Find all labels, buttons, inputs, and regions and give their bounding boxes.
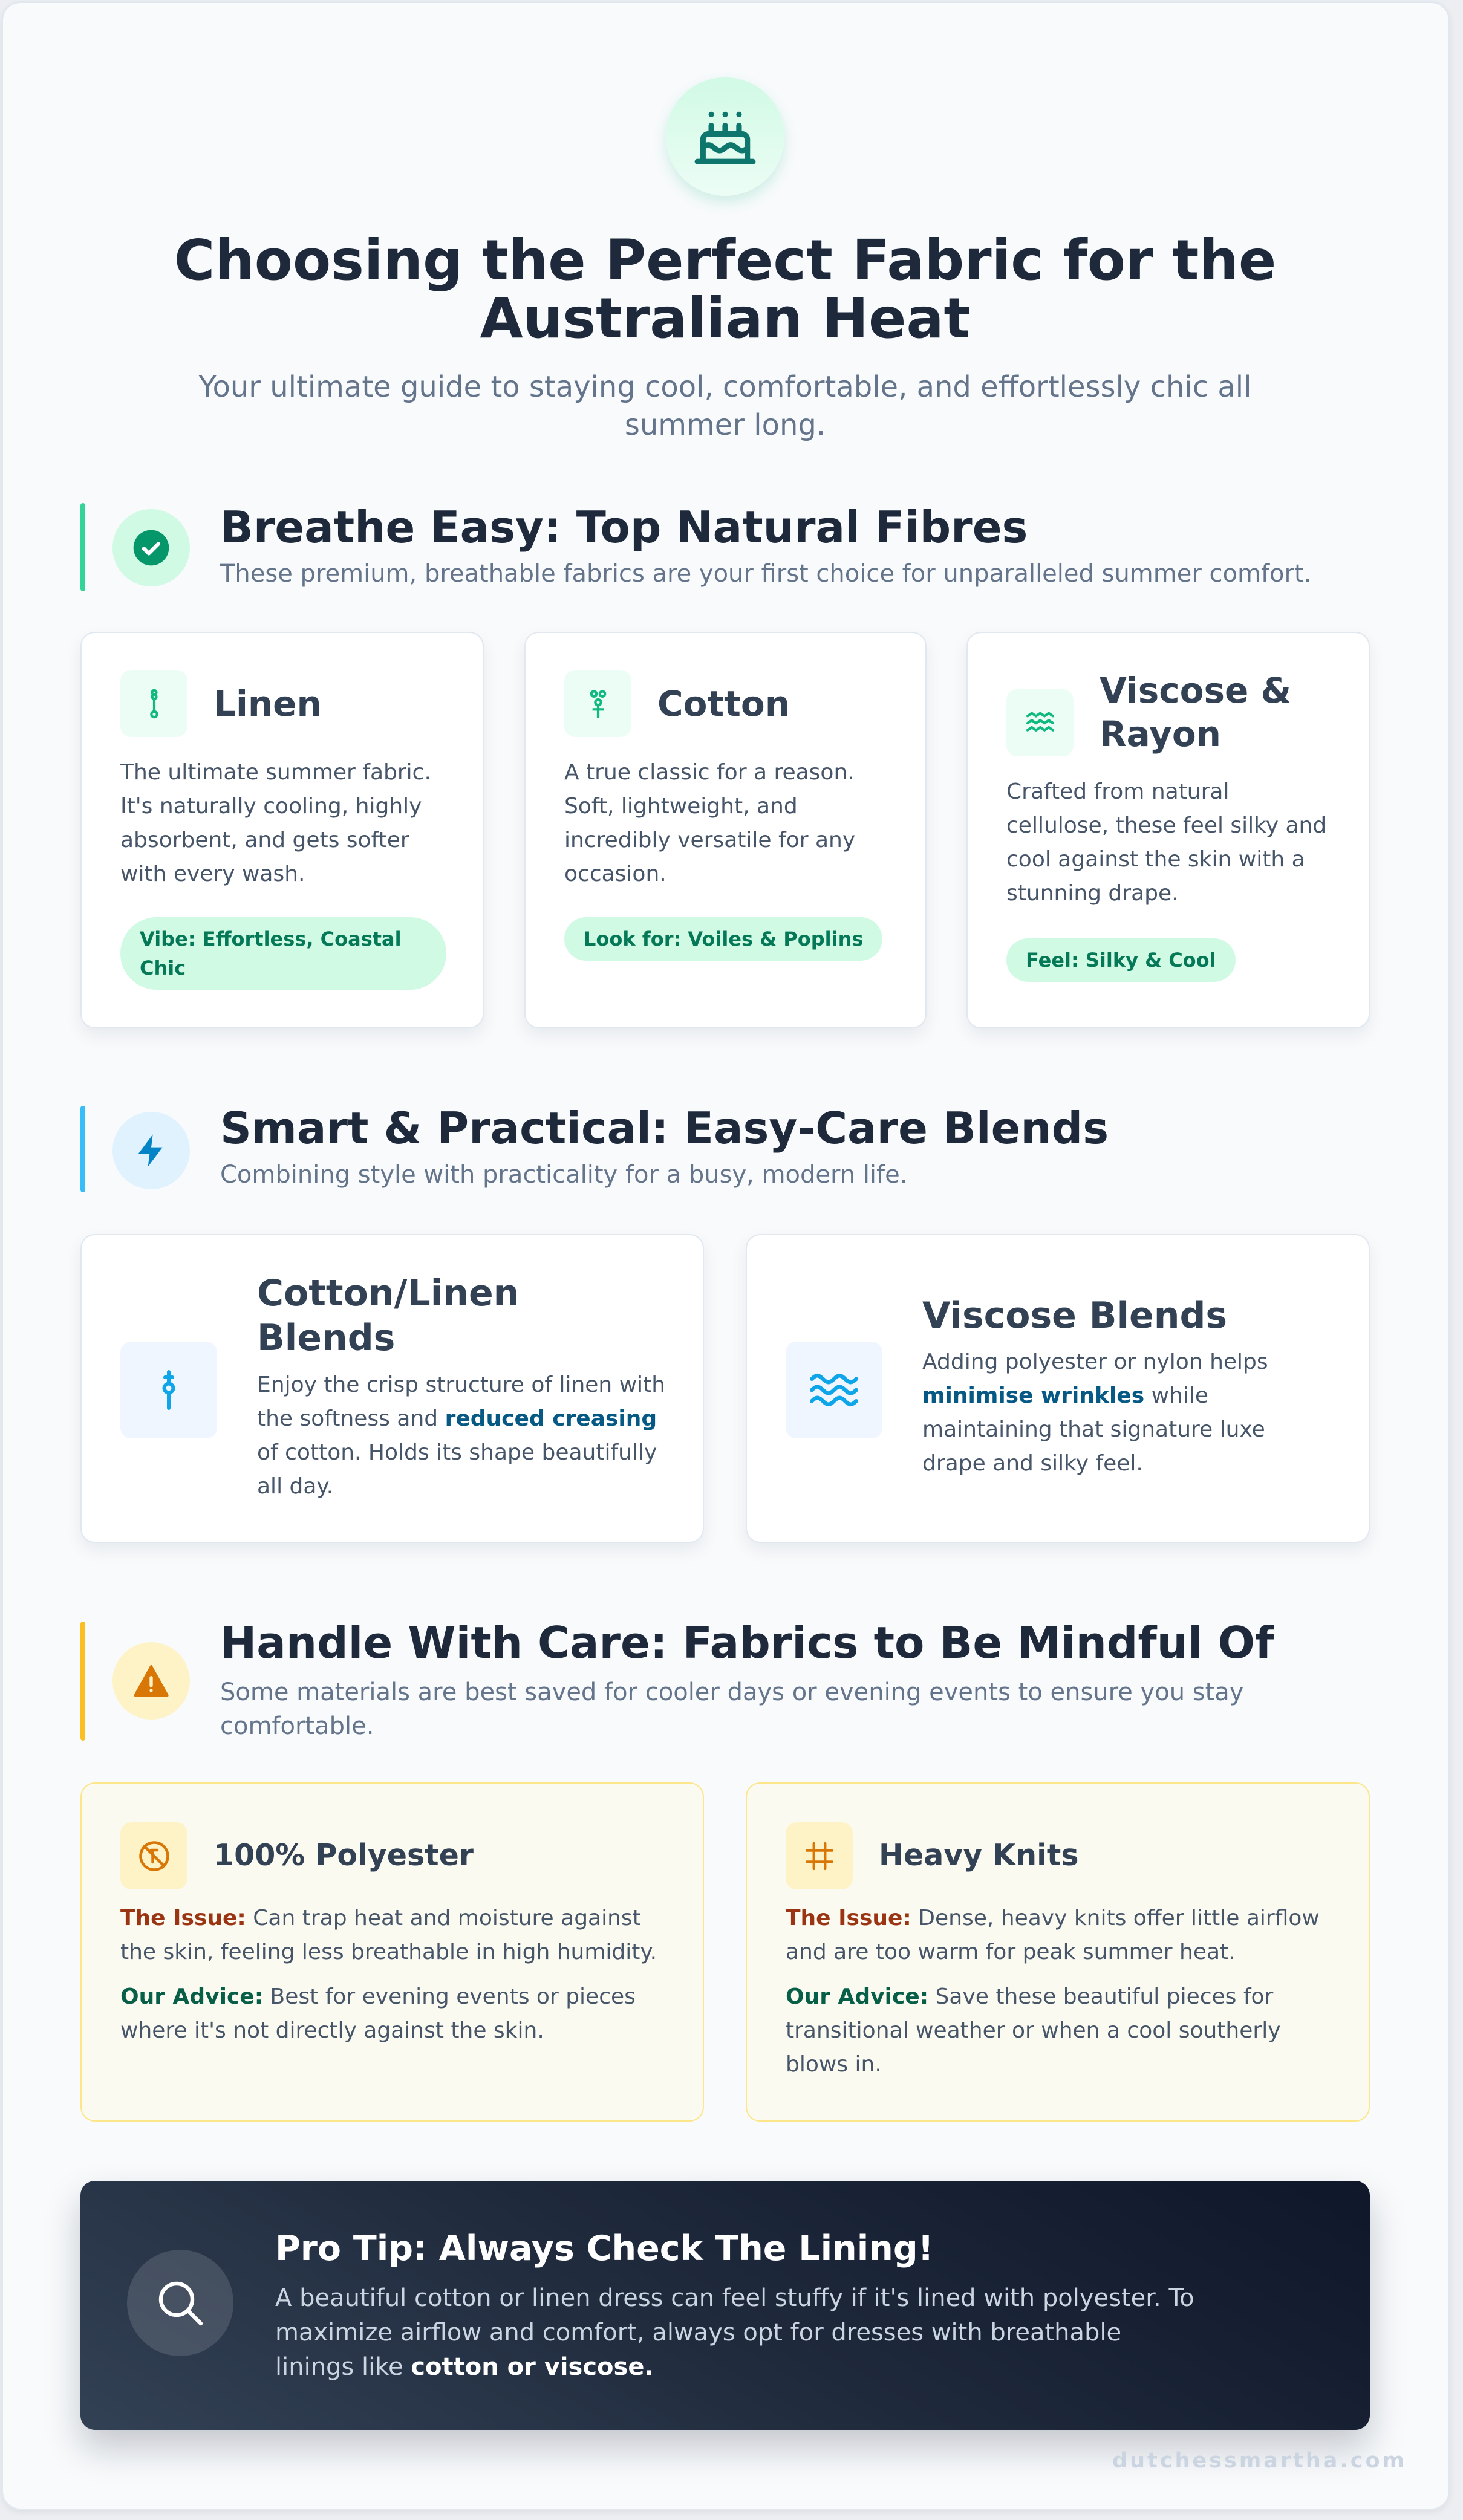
- icon: cake: [666, 77, 784, 196]
- card text: A true classic for a reason.: [564, 760, 855, 785]
- tip text: maximize airflow and comfort, always opt for dresses with breathable: [275, 2319, 1121, 2346]
- subtitle: [198, 370, 1251, 442]
- card title: Heavy Knits: [879, 1838, 1079, 1872]
- card text: The ultimate summer fabric.: [120, 760, 431, 785]
- heading: Smart & Practical: Easy-Care Blends: [220, 1103, 1109, 1154]
- card title: Cotton: [657, 683, 790, 724]
- heading: Handle With Care: Fabrics to Be Mindful Of: [220, 1617, 1274, 1668]
- icon: check: [112, 509, 190, 586]
- advice text: Our Advice: Best for evening events or pieces: [120, 1984, 636, 2009]
- tip text: [275, 2284, 1194, 2381]
- heading: Breathe Easy: Top Natural Fibres: [220, 502, 1028, 553]
- tip text: A beautiful cotton or linen dress can feel stuffy if it's lined with polyester. To: [275, 2284, 1194, 2312]
- card title: Viscose Blends: [922, 1294, 1227, 1337]
- card text: [257, 1372, 665, 1499]
- card text: drape and silky feel.: [922, 1451, 1143, 1476]
- card text: minimise wrinkles while: [922, 1383, 1208, 1408]
- issue text: The Issue: Can trap heat and moisture against: [120, 1906, 641, 1931]
- icon: waves: [1006, 689, 1074, 756]
- advice text: blows in.: [786, 2052, 882, 2077]
- card text: [564, 760, 855, 886]
- card text: Soft, lightweight, and: [564, 794, 798, 819]
- card text: stunning drape.: [1006, 881, 1179, 906]
- card text: [1006, 779, 1326, 906]
- card text: absorbent, and gets softer: [120, 828, 409, 852]
- card text: It's naturally cooling, highly: [120, 794, 422, 819]
- pill: Feel: Silky & Cool: [1026, 949, 1216, 972]
- tip text: linings like cotton or viscose.: [275, 2353, 654, 2381]
- card title: [1100, 670, 1291, 755]
- icon: lightning: [112, 1112, 190, 1189]
- card title: Viscose &: [1100, 670, 1291, 711]
- subheading: comfortable.: [220, 1712, 374, 1740]
- card text: with every wash.: [120, 862, 305, 886]
- card: cotton: [524, 632, 927, 1028]
- card text: [120, 760, 431, 886]
- card title: Cotton/Linen: [257, 1272, 519, 1314]
- pill: [120, 917, 446, 990]
- subtitle: Your ultimate guide to staying cool, comfortable, and effortlessly chic all: [199, 370, 1251, 404]
- card text: cool against the skin with a: [1006, 847, 1305, 872]
- card title: Linen: [213, 683, 322, 724]
- icon: spindle: [120, 1342, 217, 1438]
- card text: Crafted from natural: [1006, 779, 1229, 804]
- card title: Rayon: [1100, 713, 1221, 755]
- card title: Blends: [257, 1317, 395, 1359]
- card title: [257, 1272, 519, 1359]
- card: viscose blends: [746, 1234, 1370, 1543]
- pill: [564, 917, 882, 961]
- icon: magnifier: [127, 2250, 233, 2356]
- advice text: [120, 1984, 636, 2043]
- icon: linen: [120, 670, 187, 737]
- subheading: These premium, breathable fabrics are your first choice for unparalleled summer comfort.: [220, 560, 1311, 588]
- issue text: [786, 1906, 1320, 1964]
- footer: website: dutchessmartha.com: [1112, 2449, 1407, 2473]
- card title: 100% Polyester: [213, 1838, 474, 1872]
- advice text: Our Advice: Save these beautiful pieces for: [786, 1984, 1273, 2009]
- section header: blends: [80, 1103, 1109, 1192]
- subheading: Combining style with practicality for a busy, modern life.: [220, 1161, 907, 1189]
- pill: Look for: Voiles & Poplins: [584, 927, 863, 950]
- icon: warning: [112, 1642, 190, 1720]
- card text: all day.: [257, 1474, 333, 1499]
- icon: waves: [786, 1342, 882, 1438]
- issue text: The Issue: Dense, heavy knits offer little airflow: [786, 1906, 1320, 1931]
- pill: [1006, 938, 1236, 982]
- card text: incredibly versatile for any: [564, 828, 855, 852]
- card: polyester: [80, 1782, 704, 2122]
- card text: Adding polyester or nylon helps: [922, 1349, 1268, 1374]
- card: viscose & rayon: [966, 632, 1370, 1028]
- advice text: transitional weather or when a cool southerly: [786, 2018, 1281, 2043]
- card text: of cotton. Holds its shape beautifully: [257, 1440, 657, 1465]
- card text: occasion.: [564, 862, 666, 886]
- title: [174, 228, 1276, 351]
- tip heading: Pro Tip: Always Check The Lining!: [275, 2229, 934, 2268]
- card text: Enjoy the crisp structure of linen with: [257, 1372, 665, 1397]
- section header: natural fibres: [80, 502, 1311, 591]
- pill: Vibe: Effortless, Coastal Chic: [140, 927, 402, 979]
- card text: maintaining that signature luxe: [922, 1417, 1265, 1442]
- icon: no-go: [120, 1822, 187, 1889]
- card text: the softness and reduced creasing: [257, 1406, 657, 1431]
- icon: cotton: [564, 670, 631, 737]
- advice text: [786, 1984, 1281, 2077]
- card text: cellulose, these feel silky and: [1006, 813, 1326, 838]
- card: heavy knits: [746, 1782, 1370, 2122]
- issue text: and are too warm for peak summer heat.: [786, 1940, 1236, 1964]
- subheading: [220, 1678, 1243, 1740]
- issue text: the skin, feeling less breathable in high humidity.: [120, 1940, 657, 1964]
- issue text: [120, 1906, 657, 1964]
- icon: grid: [786, 1822, 853, 1889]
- title: Australian Heat: [480, 286, 971, 351]
- section header: handle with care: [80, 1617, 1274, 1741]
- advice text: where it's not directly against the skin.: [120, 2018, 544, 2043]
- card text: [922, 1349, 1268, 1476]
- subheading: Some materials are best saved for cooler days or evening events to ensure you stay: [220, 1678, 1243, 1706]
- card: cotton/linen blends: [80, 1234, 704, 1543]
- card: linen: [80, 632, 484, 1028]
- title: Choosing the Perfect Fabric for the: [174, 228, 1276, 293]
- callout: pro tip: [80, 2181, 1370, 2430]
- subtitle: summer long.: [625, 408, 826, 442]
